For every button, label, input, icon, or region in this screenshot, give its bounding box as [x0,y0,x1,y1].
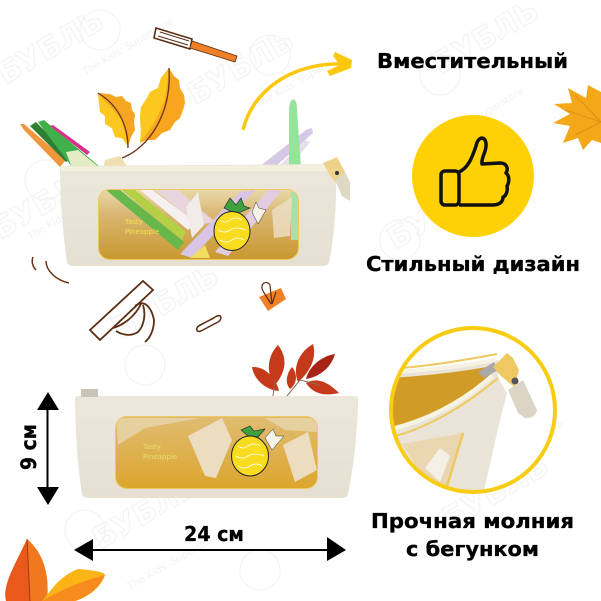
sticker text: Tasty [142,443,161,451]
pineapple sticker [214,198,266,250]
heading: Стильный дизайн: Стильный дизайн [366,252,580,276]
pineapple sticker [232,426,284,476]
icon: binder clip [259,283,286,311]
watermark captions: The Kids' Superstore [430,86,526,148]
watermark captions: The Kids' Superstore [253,49,349,111]
heading: Вместительный: Вместительный [377,49,568,73]
icon: red leaves [252,344,339,396]
icon: orange marker [154,28,237,62]
window [115,416,318,489]
label: 9 см: 9 см [17,424,41,470]
watermark pattern: БУБЛЬ [86,468,205,557]
watermark pattern: БУБЛЬ [382,168,500,257]
zipper pull [323,157,345,182]
watermark captions: The Kids' Superstore [470,419,566,481]
arrow: height dimension [37,392,59,505]
caption: Прочная молния с бегунком: Прочная молния [371,509,574,533]
watermark pattern: БУБЛЬ [437,448,555,537]
zipper slider [478,362,498,378]
pouch 2 [75,389,358,498]
sticker text: Tasty [124,218,143,226]
pouch 1: body: Pineapple [125,228,159,236]
icon: autumn leaves [98,68,185,158]
icon: yellow curved arrow [243,52,352,130]
arrow: width dimension [74,537,346,561]
pouch 1: contents [20,99,313,169]
icon: maple leaf right [553,85,601,150]
watermark pattern: БУБЛЬ [182,23,300,112]
caption: Прочная молния с бегунком [371,509,574,561]
pouch 1: body [60,157,350,266]
watermark captions: The Kids' Superstore [80,16,176,78]
watermark captions: The Kids' Superstore [125,531,221,593]
watermark captions: The Kids' Superstore [25,181,121,243]
watermark pattern: БУБЛЬ [106,258,225,347]
pouch 2: Pineapple [143,453,177,461]
icon: curved dashes [32,257,69,283]
zipper detail circle [385,328,555,495]
icon: thumbs up badge [412,115,534,237]
label: 24 см: 24 см [184,522,244,546]
zipper pull [493,353,519,387]
icon: ruler protractor [90,281,154,342]
caption: Прочная молния с бегунком: с бегунком [406,537,539,561]
icon: orange leaves bottom left [5,539,105,601]
icon: paper clip [197,316,221,331]
window [98,189,299,260]
